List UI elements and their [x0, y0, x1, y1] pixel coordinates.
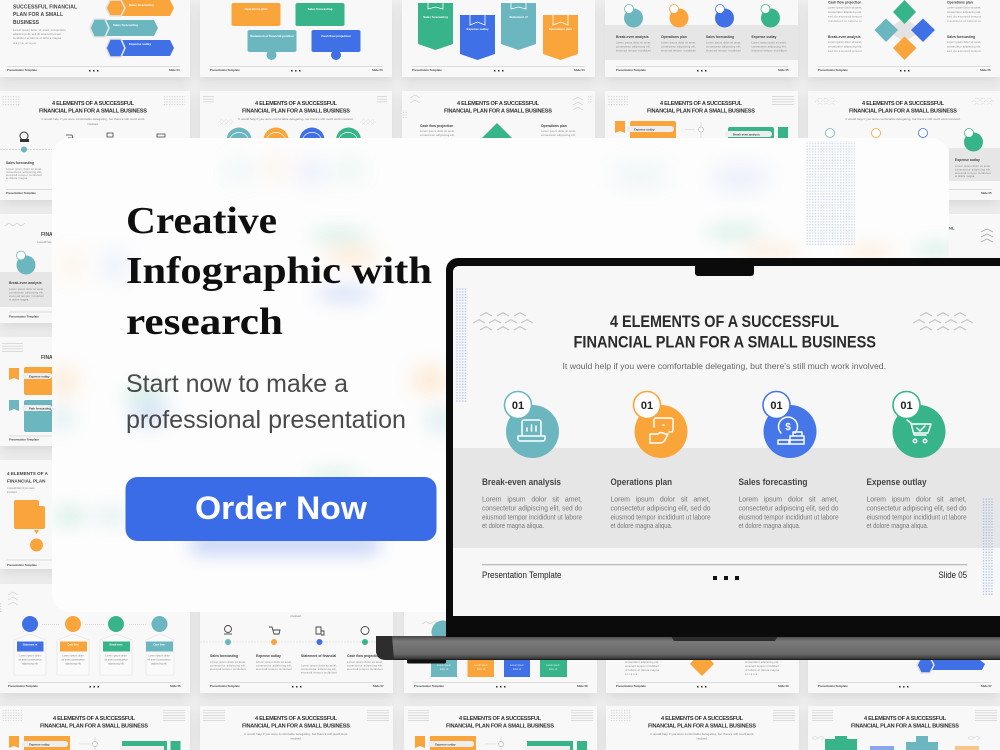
heading	[126, 200, 432, 343]
subheading: Start now to make a	[126, 370, 348, 398]
slide: row 7 tags, left	[2, 710, 185, 750]
element 3: sales forecasting: $	[785, 422, 791, 433]
slide: row 6 process arrows: adipiscing elit	[151, 662, 167, 666]
slide: row 2 tags layout: 4 ELEMENTS OF A SUCCESSFUL	[660, 101, 743, 107]
slide: row 1 circle columns: Lorem ipsum dolor sit amet,	[752, 40, 787, 44]
slide: row 1 diamonds: consectetur adipiscing elit,	[947, 44, 981, 48]
slide: row 6 hexagon	[818, 657, 992, 688]
heading: research	[126, 301, 283, 343]
slide: row 6 diamonds: eiusmod tempor incididunt	[745, 664, 779, 668]
slide title: 4 ELEMENTS OF A SUCCESSFUL	[610, 313, 839, 331]
slide: row 6 hexagon: Presentation Template	[818, 684, 848, 688]
slide: row 2 circle columns, right: consectetur adipiscing elit,	[955, 168, 991, 172]
slide: row 1 hexagon list	[7, 0, 180, 72]
slide: row 1 circle columns	[605, 4, 798, 72]
slide: row 2 ring circles	[203, 96, 387, 152]
slide: row 2 ring circles: FINANCIAL PLAN FOR A SMALL BUSINESS	[242, 108, 350, 114]
slide: row 6 diamonds	[616, 650, 789, 688]
slide: row 3 left: eiusmod tempor incididunt	[9, 294, 44, 298]
element 1: break-even analysis: consectetur adipiscing elit, sed do	[482, 506, 582, 512]
slide: row 1 hexagon list: Presentation Template	[7, 68, 37, 72]
element 3: sales forecasting: 01	[770, 400, 783, 412]
slide: row 2 ring circles: 4 ELEMENTS OF A SUCCESSFUL	[255, 101, 338, 107]
slide: row 1 circle columns: consectetur adipiscing elit,	[661, 44, 696, 48]
slide: row 2 timeline, left: Presentation Template	[6, 191, 36, 195]
slide: row 7 third: Expense outlay	[435, 742, 456, 746]
slide: row 1 hexagon list: BUSINESS	[13, 20, 40, 26]
slide: row 6 timeline: consectetur adipiscing elit,	[210, 664, 246, 668]
subheading	[126, 370, 406, 434]
slide: row 1 hexagon list: incididunt ut labore et dolore magna	[13, 36, 62, 40]
slide: row 2 circle columns, right: Lorem ipsum dolor sit amet,	[955, 164, 991, 168]
slide: row 2 circle columns, right: 4 ELEMENTS OF A SUCCESSFUL	[862, 101, 945, 107]
slide: row 2 timeline, left: eiusmod tempor incididunt	[6, 173, 42, 177]
slide: row 5 left: involved.	[7, 490, 18, 494]
slide: row 1 circle columns: eiusmod tempor incididunt	[616, 48, 651, 52]
slide: row 1 ribbon shields: Operations plan	[549, 27, 572, 31]
slide: row 6 diamonds: Presentation Template	[616, 684, 646, 688]
element 2: operations plan	[610, 392, 711, 530]
slide: row 2 tags layout: Break-even analysis	[733, 132, 760, 136]
element 2: operations plan: Lorem ipsum dolor sit amet,	[610, 496, 711, 504]
slide: row 7 fourth: It would help if you were comfortable delegating, but there's still much work	[650, 732, 754, 736]
slide: row 2 circle columns, right: Expense outlay	[955, 158, 980, 162]
panel: frosted card	[50, 138, 958, 612]
element 4: expense outlay: eiusmod tempor incididunt ut labore	[866, 514, 967, 522]
slide: row 6 process arrows: Lorem ipsum dolor	[19, 654, 41, 658]
slide: row 1 hexagon list: Sales forecasting	[129, 3, 154, 7]
slide: row 1 four boxes	[210, 3, 383, 72]
slide: row 1 circle columns: Sales forecasting	[706, 35, 734, 39]
icon: laptop chart	[518, 420, 545, 441]
slide: row 6 timeline: Cash flow projection	[347, 654, 380, 658]
slide: row 5 left	[7, 471, 52, 567]
slide: row 4 left: Path forecasting	[29, 406, 51, 410]
element 3: sales forecasting	[738, 392, 839, 530]
slide: row 1 circle columns: Expense outlay	[752, 35, 776, 39]
element 4: expense outlay: Expense outlay	[866, 477, 927, 488]
element 4: expense outlay: 01	[900, 400, 913, 412]
slide: row 4 left	[2, 342, 68, 442]
icon: coins	[778, 417, 804, 444]
slide subtitle: It would help if you were comfortable delegating, but there's still much work involved.	[562, 361, 886, 371]
slide: row 2 circle columns, right: FINANCIAL PLAN FOR A SMALL BUSINESS	[849, 108, 957, 114]
slide: row 3 left: FINANCIAL	[41, 232, 68, 238]
slide: row 6 diamonds: consectetur adipiscing elit,	[625, 660, 659, 664]
slide: row 6 timeline: consectetur adipiscing elit,	[256, 664, 292, 668]
slide: row 2 tags layout	[608, 95, 794, 141]
slide: row 2 timeline, left: et dolore magna.	[6, 176, 28, 180]
slide: row 3 right sliver: NL	[949, 226, 955, 230]
slide: row 6 process arrows: adipiscing elit	[22, 662, 38, 666]
chevron decoration, left	[473, 313, 533, 330]
slide: row 1 circle columns: consectetur adipiscing elit,	[616, 44, 651, 48]
slide: row 2 tags layout: Expense outlay	[634, 128, 655, 132]
slide: row 6 process arrows: Presentation Template	[8, 684, 38, 688]
slide: row 2 circle columns, right	[815, 98, 1000, 195]
element 4: expense outlay: et dolore magna aliqua.	[866, 523, 929, 530]
slide: row 2 diamond layout: Lorem ipsum dolor sit amet,	[420, 129, 455, 133]
slide: row 1 ribbon shields: Statement of	[509, 15, 528, 19]
slide: row 6 timeline: eiusmod tempor incididunt	[301, 670, 337, 674]
slide: row 7 second: involved.	[290, 736, 302, 740]
slide: row 5 left: It would help if you were	[7, 486, 35, 490]
slide footer: Presentation Template	[482, 570, 562, 580]
slide: row 1 ribbon shields	[412, 0, 585, 72]
grey band	[453, 448, 1000, 548]
slide: row 3 right sliver	[949, 226, 993, 242]
slide footer	[482, 565, 967, 580]
slide: row 1 hexagon list: Lorem ipsum dolor sit amet, consectetur	[13, 28, 66, 32]
slide: row 1 circle columns: Lorem ipsum dolor sit amet,	[616, 40, 651, 44]
slide: row 6 process arrows: sit amet consectetur	[61, 658, 85, 662]
slide: row 6 diamonds: consectetur adipiscing elit,	[745, 660, 779, 664]
element 3: sales forecasting: Sales forecasting	[738, 477, 808, 488]
slide: row 6 process arrows: adipiscing elit	[65, 662, 81, 666]
element 4: expense outlay: consectetur adipiscing elit, sed do	[866, 506, 967, 512]
slide: row 4 left: Expense outlay	[29, 374, 50, 378]
slide: row 6 timeline: consectetur adipiscing elit,	[347, 664, 383, 668]
slide: row 2 timeline, left: consectetur adipiscing elit,	[6, 170, 42, 174]
slide: row 6 colored columns: Presentation Template	[414, 684, 444, 688]
slide: row 1 circle columns: Break-even analysis	[616, 35, 649, 39]
slide: row 6 diamonds: eiusmod tempor incididunt	[625, 664, 659, 668]
slide: row 6 process arrows: Slide 06	[170, 684, 181, 688]
element 3: sales forecasting: consectetur adipiscing elit, sed do	[738, 506, 839, 512]
button: order now: Order Now	[195, 490, 367, 526]
slide: row 1 diamonds: Lorem ipsum dolor sit amet,	[828, 40, 862, 44]
slide: row 1 circle columns: eiusmod tempor incididunt	[752, 48, 787, 52]
slide: row 6 timeline: Sales forecasting	[210, 654, 238, 658]
slide: row 2 ring circles: It would help if you were comfortable delegating, but there's still much work involved.	[238, 117, 354, 121]
slide: row 6 timeline: eiusmod tempor incididunt	[210, 667, 246, 671]
slide: row 6 colored columns: dolor sit	[440, 668, 449, 671]
slide: row 7 second: 4 ELEMENTS OF A SUCCESSFUL	[255, 716, 338, 722]
slide: row 1 four boxes: Cash flow projection	[321, 34, 351, 38]
slide: row 6 process arrows: Lorem ipsum dolor	[105, 654, 127, 658]
slide: row 1 diamonds: Lorem ipsum dolor sit amet,	[947, 40, 981, 44]
slide: row 7 fourth: involved.	[696, 736, 708, 740]
slide: row 1 circle columns: eiusmod tempor incididunt	[661, 48, 696, 52]
slide: row 2 diamond layout: FINANCIAL PLAN FOR A SMALL BUSINESS	[444, 108, 552, 114]
slide: row 6 diamonds: aliqua.	[625, 672, 639, 676]
laptop screen	[453, 266, 1000, 616]
slide: row 1 diamonds: Presentation Template	[818, 68, 848, 72]
button: order now	[126, 477, 436, 541]
laptop bezel	[446, 258, 1000, 637]
slide: row 7 fourth: FINANCIAL PLAN FOR A SMALL BUSINESS	[648, 724, 756, 730]
slide: row 2 circle columns, right: eiusmod tempor incididunt	[955, 171, 991, 175]
slide: row 3 left: Presentation Template	[9, 314, 39, 318]
element 3: sales forecasting: et dolore magna aliqua.	[738, 523, 801, 530]
slide: row 6 timeline: Slide 07	[373, 684, 384, 688]
slide: row 3 left: consectetur adipiscing elit,	[9, 290, 44, 294]
slide: row 7 fifth	[812, 710, 997, 750]
slide: row 2 diamond layout: 4 ELEMENTS OF A SUCCESSFUL	[457, 101, 540, 107]
slide: row 1 ribbon shields: Slide 04	[574, 68, 585, 72]
dot pattern	[805, 141, 855, 245]
element 2: operations plan: et dolore magna aliqua.	[610, 523, 673, 530]
slide: row 6 timeline: involved.	[290, 614, 302, 618]
slide: row 7 second	[203, 710, 389, 740]
slide: row 7 tags, left: Expense outlay	[29, 742, 50, 746]
slide: row 6 process arrows	[0, 592, 181, 688]
slide: row 6 process arrows: sit amet consectetur	[104, 658, 128, 662]
slide title: FINANCIAL PLAN FOR A SMALL BUSINESS	[574, 334, 876, 352]
slide: row 6 colored columns	[414, 620, 588, 688]
slide: row 6 hexagon: Slide 07	[981, 684, 992, 688]
slide: row 7 second: It would help if you were comfortable delegating, but there's still much work	[244, 732, 348, 736]
slide: row 2 timeline, left: 4 ELEMENTS OF A SUCCESSFUL	[52, 101, 135, 107]
slide: row 6 colored columns: Slide 08	[577, 684, 588, 688]
laptop camera notch	[695, 265, 754, 276]
slide: row 6 diamonds: ut labore et dolore magna	[745, 668, 780, 672]
slide: row 1 diamonds: incididunt ut labore et	[947, 19, 981, 23]
slide: row 6 timeline: Lorem ipsum dolor sit amet,	[256, 660, 292, 664]
slide: row 6 process arrows: Statement of	[23, 644, 37, 646]
slide: row 6 timeline	[200, 614, 393, 688]
slide: row 4 left: FINANCIAL	[41, 355, 68, 361]
slide: row 1 circle columns: Presentation Template	[616, 68, 646, 72]
slide: row 3 left: It would help	[37, 240, 52, 244]
slide: row 6 diamonds: Slide 09	[778, 684, 789, 688]
slide: row 6 process arrows: Lorem ipsum dolor	[62, 654, 84, 658]
slide: row 6 process arrows: Lorem ipsum dolor	[148, 654, 170, 658]
slide: row 1 diamonds: Cash flow projection	[828, 0, 861, 4]
slide: row 6 colored columns: Lorem ipsum	[546, 664, 560, 667]
subheading: professional presentation	[126, 406, 406, 434]
slide footer: Slide 05	[938, 570, 967, 580]
dot patterns	[456, 288, 466, 402]
slide: row 1 diamonds: Operations plan	[947, 0, 973, 4]
slide: row 7 third: FINANCIAL PLAN FOR A SMALL BUSINESS	[446, 724, 554, 730]
slide title	[574, 316, 876, 348]
slide: row 6 colored columns: dolor sit	[477, 668, 486, 671]
slide: row 7 fourth: 4 ELEMENTS OF A SUCCESSFUL	[661, 716, 744, 722]
element 2: operations plan: 01	[641, 400, 653, 412]
slide: row 6 process arrows: Cash flow	[67, 644, 79, 646]
slide: row 5 left: 4 ELEMENTS OF A	[7, 471, 49, 476]
slide: row 6 process arrows: Cash flow	[153, 644, 165, 646]
slide: row 7 third	[408, 710, 593, 750]
slide: row 6 process arrows: sit amet consectetur	[18, 658, 42, 662]
blurred colour spots behind the glass	[50, 154, 958, 554]
slide: row 1 hexagon list: Sales forecasting	[113, 23, 138, 27]
slide: row 1 diamonds: Sales forecasting	[947, 35, 975, 39]
slide: row 1 hexagon list: SUCCESSFUL FINANCIAL	[13, 4, 77, 10]
slide: row 6 process arrows: Break-even	[110, 644, 123, 646]
slide: row 1 diamonds: sed do eiusmod tempor	[947, 14, 981, 18]
slide: row 3 left	[0, 223, 68, 318]
slide: row 1 circle columns: Lorem ipsum dolor sit amet,	[661, 40, 696, 44]
slide: row 6 timeline: consectetur adipiscing elit,	[301, 667, 337, 671]
slide: row 1 ribbon shields: Sales forecasting	[423, 15, 448, 19]
element 2: operations plan: eiusmod tempor incididunt ut labore	[610, 514, 711, 522]
slide: row 5 left: Presentation Template	[7, 563, 37, 567]
slide: row 6 colored columns: Lorem ipsum	[510, 664, 524, 667]
element 1: break-even analysis: 01	[512, 400, 524, 412]
slide: row 2 diamond layout: Lorem ipsum dolor sit amet,	[541, 129, 576, 133]
slide: row 1 circle columns: Operations plan	[661, 35, 687, 39]
slide: row 2 circle columns, right: et dolore magna.	[955, 174, 975, 178]
slide: row 1 diamonds: consectetur adipiscing elit,	[828, 10, 862, 14]
slide: row 1 diamonds: sed do eiusmod tempor	[947, 49, 981, 53]
slide: row 1 four boxes: Slide 03	[372, 68, 383, 72]
slide: row 7 second: FINANCIAL PLAN FOR A SMALL BUSINESS	[242, 724, 350, 730]
slide: row 1 hexagon list: magna aliqua.	[13, 41, 37, 45]
element 2: operations plan: consectetur adipiscing elit, sed do	[610, 506, 711, 512]
slide: row 6 timeline: Expense outlay	[256, 654, 281, 658]
icon: shopping cart	[907, 420, 931, 435]
slide: row 6 diamonds: aliqua.	[745, 672, 759, 676]
slide: row 7 fourth	[610, 710, 795, 740]
slide: row 7 fifth: 4 ELEMENTS OF A SUCCESSFUL	[864, 716, 947, 722]
element 1: break-even analysis: et dolore magna aliqua.	[482, 523, 544, 530]
slide: row 1 four boxes: Operations plan	[245, 7, 268, 11]
slide: row 2 timeline, left: involved.	[87, 122, 99, 126]
slide: row 2 diamond layout	[403, 95, 593, 139]
slide: row 2 diamond layout: Operations plan	[541, 124, 567, 128]
slide: row 1 ribbon shields: Expense outlay	[466, 27, 489, 31]
slide: row 6 timeline: Lorem ipsum dolor sit amet,	[347, 660, 383, 664]
slide: row 1 diamonds: sed do eiusmod tempor	[828, 14, 862, 18]
slide: row 1 hexagon list: Slide 04	[169, 68, 180, 72]
slide: row 3 left: et dolore magna.	[9, 298, 29, 302]
slide: row 1 diamonds: incididunt ut labore et	[828, 19, 862, 23]
slide: row 1 diamonds: consectetur adipiscing elit,	[947, 10, 981, 14]
slide: row 2 timeline, left: Sales forecasting	[6, 161, 34, 165]
element 4: expense outlay	[866, 392, 967, 530]
slide: row 1 diamonds	[818, 0, 991, 72]
slide: row 2 diamond layout: Cash flow projection	[420, 124, 453, 128]
element 1: break-even analysis: eiusmod tempor incididunt ut labore	[482, 514, 582, 522]
slide: row 2 tags layout: FINANCIAL PLAN FOR A SMALL BUSINESS	[647, 108, 755, 114]
slide: row 6 colored columns: Lorem ipsum	[474, 664, 488, 667]
slide: row 1 circle columns: eiusmod tempor incididunt	[706, 48, 741, 52]
heading: Infographic with	[126, 250, 432, 292]
slide: row 2 timeline, left: FINANCIAL PLAN FOR A SMALL BUSINESS	[39, 108, 147, 114]
laptop base	[376, 636, 1000, 664]
element 3: sales forecasting: eiusmod tempor incididunt ut labore	[738, 514, 839, 522]
element 3: sales forecasting: Lorem ipsum dolor sit amet,	[738, 496, 839, 504]
slide: row 6 timeline: Lorem ipsum dolor sit amet,	[210, 660, 246, 664]
slide: row 4 left: Presentation Template	[9, 438, 39, 442]
heading: Creative	[126, 200, 277, 242]
slide: row 1 diamonds: Break-even analysis	[828, 35, 861, 39]
slide: row 1 diamonds: Lorem ipsum dolor sit amet,	[947, 6, 981, 10]
slide: row 6 process arrows: adipiscing elit	[108, 662, 124, 666]
icon: hand and banknote	[650, 418, 673, 443]
slide: row 1 circle columns: Lorem ipsum dolor sit amet,	[706, 40, 741, 44]
slide: row 1 four boxes: Sales forecasting	[308, 7, 333, 11]
slide: row 1 ribbon shields: Presentation Template	[412, 68, 442, 72]
slide: row 6 colored columns: Lorem ipsum	[437, 664, 451, 667]
slide: row 6 timeline: Statement of financial	[301, 654, 336, 658]
slide: row 7 third: 4 ELEMENTS OF A SUCCESSFUL	[459, 716, 542, 722]
slide: row 1 circle columns: consectetur adipiscing elit,	[706, 44, 741, 48]
slide: row 1 hexagon list: Expense outlay	[129, 42, 151, 46]
slide: row 2 timeline, left: Lorem ipsum dolor sit amet,	[6, 167, 42, 171]
slide: row 1 diamonds: Lorem ipsum dolor sit amet,	[828, 6, 862, 10]
element 1: break-even analysis: Break-even analysis	[482, 477, 561, 488]
slide: row 7 fifth: FINANCIAL PLAN FOR A SMALL BUSINESS	[851, 724, 959, 730]
slide: row 6 process arrows: sit amet consectetur	[147, 658, 171, 662]
slide: row 7 tags, left: 4 ELEMENTS OF A SUCCESSFUL	[53, 716, 136, 722]
element 2: operations plan: Operations plan	[610, 477, 672, 488]
slide: row 1 hexagon list: PLAN FOR A SMALL	[13, 12, 63, 18]
slide: row 1 circle columns: consectetur adipiscing elit,	[752, 44, 787, 48]
slide: row 1 four boxes: Presentation Template	[210, 68, 240, 72]
slide: row 2 circle columns, right: Slide 05	[981, 191, 992, 195]
slide: row 6 colored columns: dolor sit	[549, 668, 558, 671]
element 4: expense outlay: Lorem ipsum dolor sit amet,	[866, 496, 967, 504]
slide: row 3 left: Lorem ipsum dolor sit amet,	[9, 287, 44, 291]
slide: row 2 diamond layout: consectetur adipiscing elit,	[541, 133, 576, 137]
slide: row 1 diamonds: sed do eiusmod tempor	[828, 49, 862, 53]
slide: row 6 diamonds: ut labore et dolore magna	[625, 668, 660, 672]
slide: row 6 timeline: eiusmod tempor incididunt	[347, 667, 383, 671]
slide: row 7 tags, left: FINANCIAL PLAN FOR A SMALL BUSINESS	[40, 724, 148, 730]
slide: row 2 timeline, left	[0, 95, 185, 195]
element 1: break-even analysis	[482, 392, 582, 530]
element 1: break-even analysis: Lorem ipsum dolor sit amet,	[482, 496, 582, 504]
slide: row 1 four boxes: Statement of financial position	[250, 34, 294, 38]
slide: row 2 diamond layout: consectetur adipiscing elit,	[420, 133, 455, 137]
slide: row 2 timeline, left: It would help if you were comfortable delegating, but there's still much work	[42, 117, 145, 121]
slide: row 3 left: Break-even analysis	[9, 281, 42, 285]
slide: row 1 diamonds: Slide 06	[980, 68, 991, 72]
slide: row 1 diamonds: consectetur adipiscing elit,	[828, 44, 862, 48]
slide: row 1 circle columns: Slide 05	[778, 68, 789, 72]
slide: row 1 hexagon list: adipiscing elit, sed do eiusmod tempor	[13, 32, 61, 36]
slide: row 2 circle columns, right: It would help if you were comfortable delegating, but there's still much work involved.	[846, 117, 961, 121]
laptop	[376, 258, 1000, 664]
slide: row 5 left: FINANCIAL PLAN	[7, 478, 46, 484]
slide: row 6 colored columns: dolor sit	[513, 668, 522, 671]
chevron decoration, right	[913, 313, 973, 330]
slide: row 6 timeline: Lorem ipsum dolor sit amet,	[301, 664, 337, 668]
slide: row 6 timeline: Presentation Template	[210, 684, 240, 688]
slide: row 6 timeline: eiusmod tempor incididunt	[256, 667, 292, 671]
